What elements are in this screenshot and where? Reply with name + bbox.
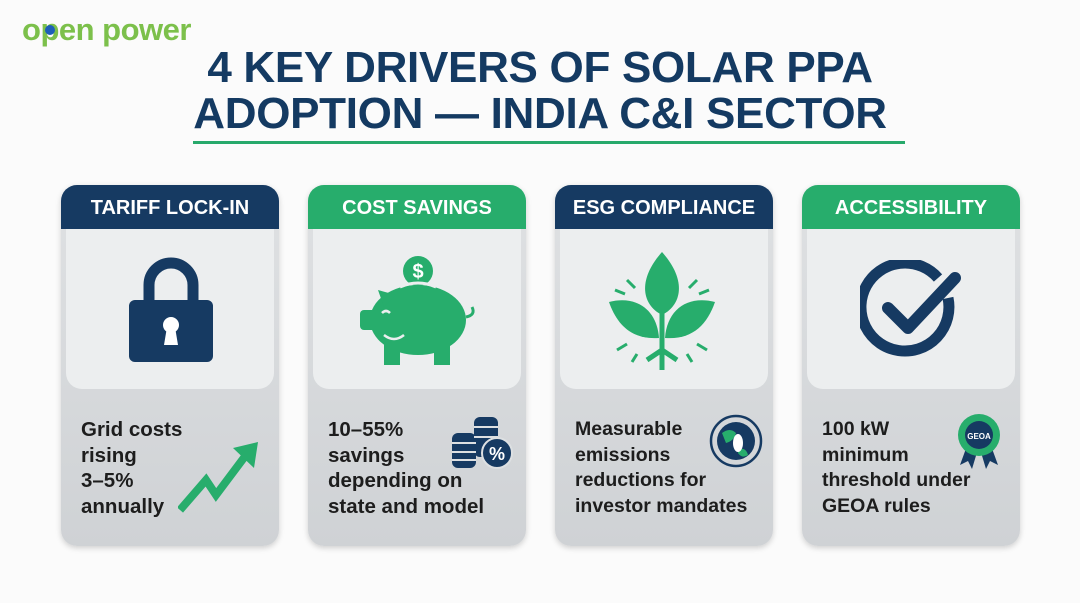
title (193, 43, 887, 138)
text: 100 kW (822, 418, 889, 440)
heading: ESG COMPLIANCE (573, 197, 755, 219)
heading: COST SAVINGS (342, 197, 492, 219)
text: annually (81, 494, 164, 518)
icon: check circle (860, 260, 961, 356)
heading (61, 185, 279, 229)
text: Grid costs (81, 418, 182, 441)
text (575, 418, 747, 516)
panel: esg compliance (555, 185, 773, 546)
text (81, 418, 182, 518)
text: 3–5% (81, 469, 133, 492)
text: reductions for (575, 469, 706, 491)
text: 10–55% (328, 418, 403, 441)
text: state and model (328, 494, 484, 518)
panel: accessibility (802, 185, 1020, 546)
icon: coins with percent: % (489, 444, 505, 464)
text (822, 418, 970, 516)
logo: open power (22, 12, 191, 47)
heading: TARIFF LOCK-IN (91, 197, 249, 219)
icon: globe footprint (710, 414, 762, 468)
heading (802, 185, 1020, 229)
icon: coins with percent (452, 417, 513, 469)
text: minimum (822, 444, 909, 466)
icon: piggy bank: $ (412, 261, 424, 283)
icon: plant (609, 252, 715, 370)
text: investor mandates (575, 494, 747, 516)
icon: padlock (129, 258, 213, 362)
heading (308, 185, 526, 229)
title: 4 KEY DRIVERS OF SOLAR PPA (207, 43, 873, 92)
title: ADOPTION — INDIA C&I SECTOR (193, 89, 887, 138)
panel: cost savings (308, 185, 526, 546)
text: savings (328, 444, 404, 466)
text: threshold under (822, 469, 970, 491)
text: GEOA rules (822, 494, 931, 516)
text: emissions (575, 444, 670, 466)
text: rising (81, 444, 137, 466)
panel: tariff lock-in (61, 185, 279, 546)
icon: piggy bank (360, 256, 475, 365)
heading: ACCESSIBILITY (835, 197, 987, 219)
icon: rising arrow (178, 442, 258, 512)
text (328, 418, 484, 518)
icon: GEOA badge (958, 414, 1000, 469)
text: Measurable (575, 418, 682, 440)
heading (555, 185, 773, 229)
icon: GEOA badge: GEOA (967, 432, 991, 441)
text: depending on (328, 469, 462, 492)
